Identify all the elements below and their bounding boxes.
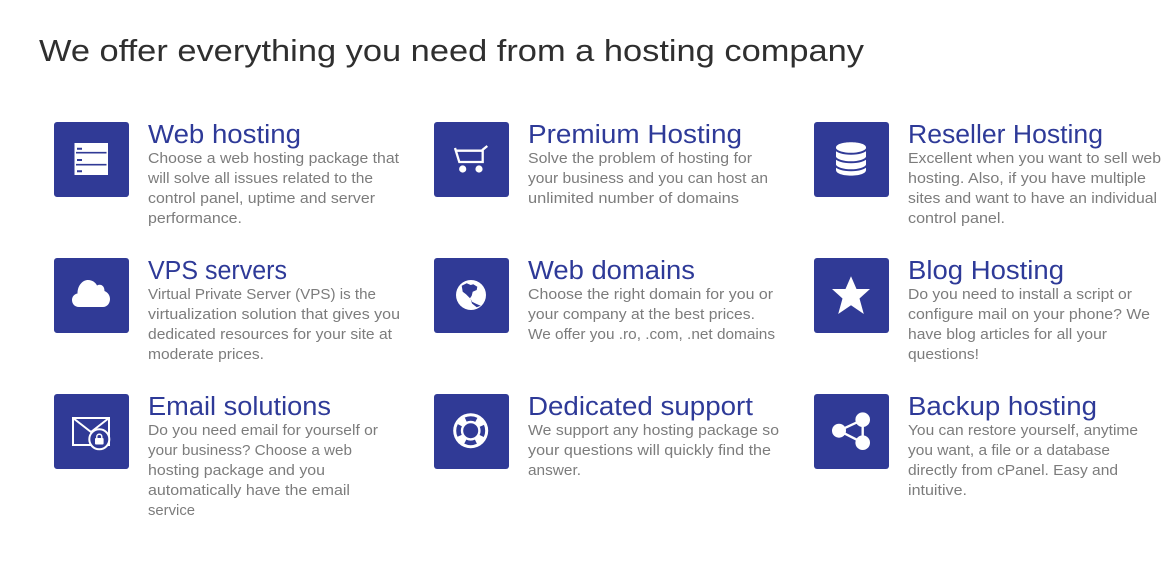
text: dedicated support description: answer. (528, 463, 581, 479)
heading: premium hosting: Premium Hosting (528, 121, 742, 149)
text: email solutions description: hosting package and you (148, 463, 325, 479)
panel: backup hosting (814, 393, 1138, 499)
text: email solutions description: Do you need email for yourself or (148, 423, 378, 439)
text: premium hosting description: your business and you can host an (528, 171, 768, 187)
text: vps servers description: dedicated resources for your site at (148, 327, 392, 343)
text: backup hosting description: intuitive. (908, 483, 967, 499)
text: web hosting description: will solve all issues related to the (147, 171, 373, 187)
heading: backup hosting: Backup hosting (908, 393, 1097, 421)
heading: email solutions: Email solutions (148, 393, 331, 421)
heading: web domains: Web domains (528, 257, 695, 285)
panel: premium hosting (434, 121, 768, 207)
panel: web domains (434, 257, 775, 343)
panel: blog hosting (814, 257, 1150, 363)
text: premium hosting description: Solve the problem of hosting for (528, 151, 752, 167)
text: web hosting description: performance. (148, 211, 242, 227)
text: vps servers description: moderate prices. (148, 347, 264, 363)
panel: web hosting (54, 121, 399, 227)
heading: dedicated support: Dedicated support (528, 393, 753, 421)
icon: envelope with lock (54, 394, 129, 469)
text: web hosting description: control panel, uptime and server (148, 191, 375, 207)
text: backup hosting description (908, 423, 1138, 499)
text: premium hosting description: unlimited number of domains (528, 191, 739, 207)
text: backup hosting description: You can restore yourself, anytime (908, 423, 1138, 439)
icon: database (814, 122, 889, 197)
text: backup hosting description: you want, a file or a database (908, 443, 1110, 459)
text: web domains description: Choose the right domain for you or (528, 287, 773, 303)
text: reseller hosting description (908, 151, 1161, 227)
text: blog hosting description: configure mail on your phone? We (908, 307, 1150, 323)
text: blog hosting description (908, 287, 1150, 363)
icon: cloud (54, 258, 129, 333)
icon: share nodes (814, 394, 889, 469)
text: email solutions description (148, 423, 378, 519)
text: web hosting description (147, 151, 399, 227)
title: We offer everything you need from a hosting company (39, 33, 865, 68)
text: web domains description: your company at the best prices. (528, 307, 755, 323)
text: blog hosting description: Do you need to install a script or (908, 287, 1132, 303)
text: blog hosting description: have blog articles for all your (908, 327, 1107, 343)
text: reseller hosting description: Excellent when you want to sell web (908, 151, 1161, 167)
text: vps servers description: virtualization solution that gives you (148, 307, 400, 323)
panel: vps servers (54, 257, 400, 363)
heading: web hosting: Web hosting (148, 121, 301, 149)
panel: reseller hosting (814, 121, 1161, 227)
icon: globe (434, 258, 509, 333)
text: vps servers description (148, 287, 400, 363)
text: dedicated support description: your questions will quickly find the (528, 443, 771, 459)
text: web hosting description: Choose a web hosting package that (148, 151, 399, 167)
heading: vps servers: VPS servers (148, 257, 287, 285)
text: email solutions description: your business? Choose a web (148, 443, 352, 459)
heading: reseller hosting: Reseller Hosting (908, 121, 1103, 149)
text: blog hosting description: questions! (908, 347, 979, 363)
text: reseller hosting description: sites and want to have an individual (908, 191, 1157, 207)
panel: email solutions (54, 393, 378, 519)
text: backup hosting description: directly from cPanel. Easy and (908, 463, 1118, 479)
text: email solutions description: service (148, 503, 195, 519)
text: web domains description: We offer you .ro, .com, .net domains (528, 327, 775, 343)
text: reseller hosting description: hosting. Also, if you have multiple (908, 171, 1146, 187)
text: dedicated support description (528, 423, 779, 479)
text: dedicated support description: We support any hosting package so (528, 423, 779, 439)
panel: dedicated support (434, 393, 779, 479)
icon: star (814, 258, 889, 333)
icon: server (54, 122, 129, 197)
text: premium hosting description (528, 151, 768, 207)
icon: shopping cart (434, 122, 509, 197)
text: vps servers description: Virtual Private Server (VPS) is the (148, 287, 376, 303)
text: email solutions description: automatically have the email (148, 483, 350, 499)
heading: blog hosting: Blog Hosting (908, 257, 1064, 285)
text: reseller hosting description: control panel. (908, 211, 1005, 227)
icon: life ring (434, 394, 509, 469)
text: web domains description (528, 287, 775, 343)
